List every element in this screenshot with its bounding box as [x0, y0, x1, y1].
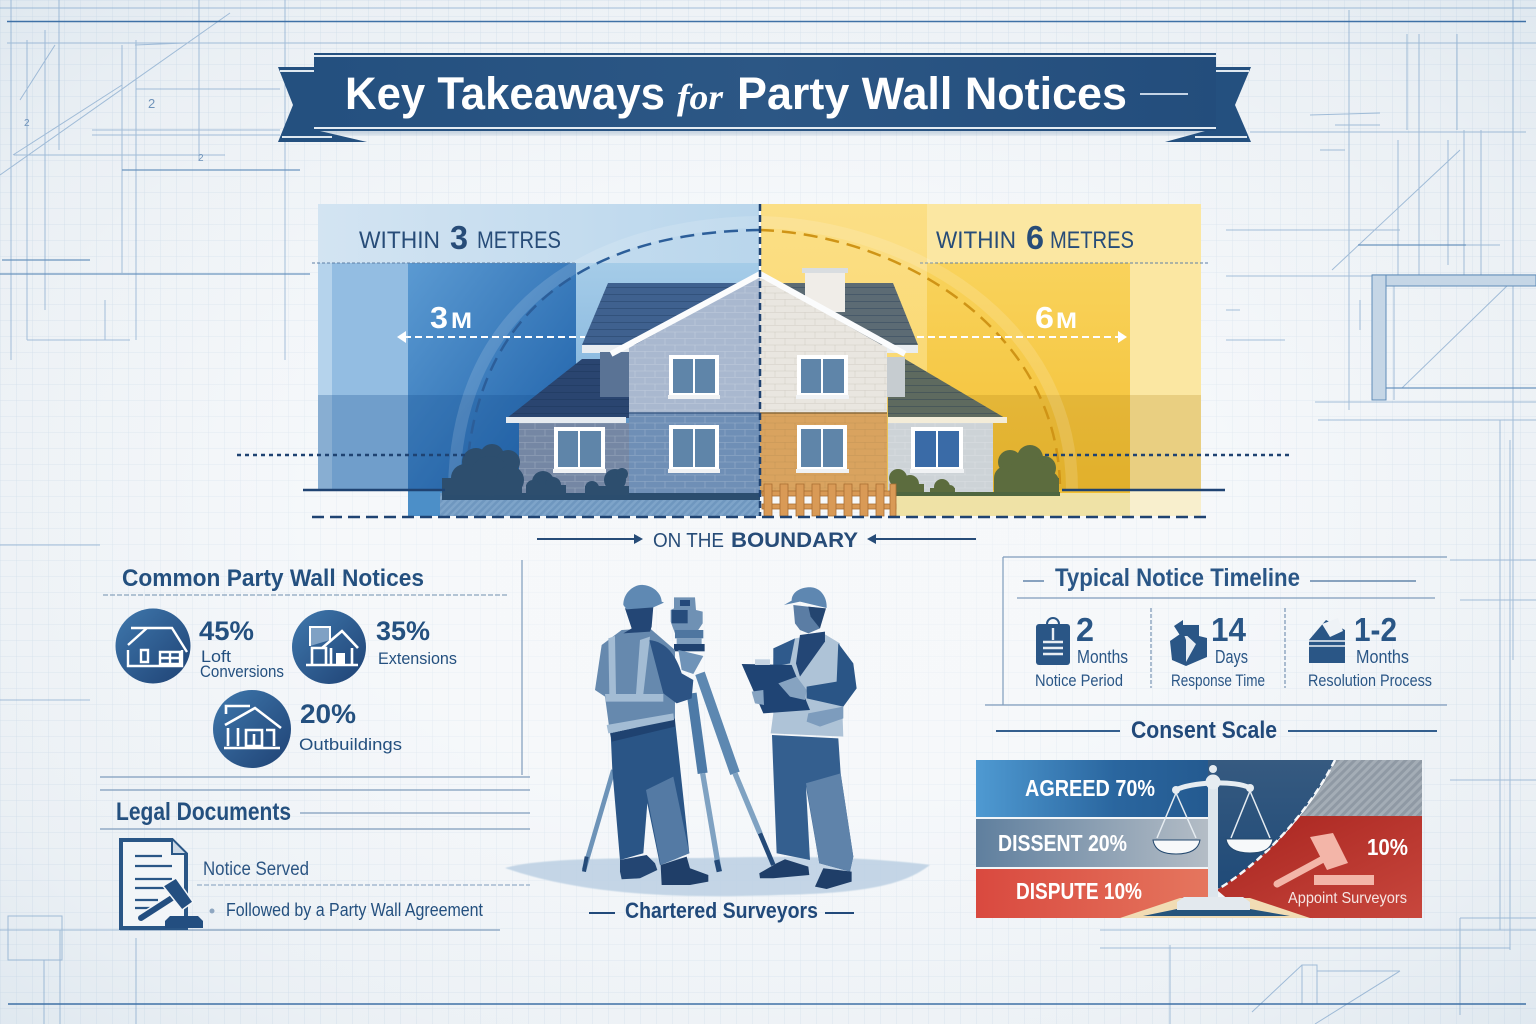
heading: Common Party Wall Notices: [122, 565, 424, 592]
panel: typical notice timeline: [985, 557, 1447, 705]
icon: balance scale: [1120, 765, 1310, 918]
chimney: [805, 270, 845, 312]
icon: loft conversions: [116, 608, 190, 684]
icon: document and gavel: [121, 840, 203, 928]
stat: 1-2 months resolution process: Resolution Process: [1308, 671, 1432, 690]
banner shadow: [316, 128, 1214, 134]
ground wash: [505, 857, 930, 896]
text: notice served: Notice Served: [203, 859, 309, 880]
title text: for: [677, 77, 724, 117]
panel: consent scale: [976, 717, 1437, 918]
measure: 3m arrow: [397, 300, 585, 343]
icon: extensions: [292, 610, 366, 684]
tripod: [584, 673, 773, 872]
stat: 45% loft conversions: Conversions: [200, 662, 284, 681]
label: within 6 metres: WITHIN: [936, 227, 1016, 254]
label: within 3 metres: WITHIN: [359, 227, 440, 254]
stat: 14 days response time: 14: [1211, 611, 1247, 648]
stat: 2 months notice period: Notice Period: [1035, 671, 1123, 690]
banner main band: [314, 53, 1216, 131]
icon: ballot box: [1309, 618, 1345, 663]
stat: 14 days response time: [1171, 611, 1265, 690]
stat: 2 months notice period: [1035, 611, 1128, 690]
boundary and ground lines: [237, 204, 1290, 517]
drafting lines, top left: [0, 0, 1536, 360]
stat: 20% outbuildings: Outbuildings: [299, 735, 402, 754]
house: [442, 268, 1007, 500]
surveyor right with clipboard: [742, 587, 857, 889]
hero diagram: boundary zones and house: [237, 204, 1290, 552]
panel: legal documents: [100, 798, 530, 930]
measure: 6m arrow: M: [1056, 308, 1077, 333]
icon: outbuildings: [213, 690, 291, 768]
text: appoint surveyors: Appoint Surveyors: [1288, 890, 1407, 907]
title banner: [278, 53, 1251, 142]
title text: Key Takeaways: [345, 68, 665, 119]
bar: agreed: AGREED 70%: [1025, 775, 1155, 801]
icon: clipboard: [1036, 618, 1070, 665]
stat: 45% loft conversions: 45%: [199, 616, 254, 646]
windows: [556, 357, 961, 469]
stat: 20% outbuildings: [299, 699, 402, 754]
label: within 3 metres: 3: [450, 219, 468, 256]
stat: 2 months notice period: 2: [1076, 611, 1094, 648]
zone: within 6 metres: [761, 204, 1201, 516]
bar: dissent: DISSENT 20%: [998, 830, 1127, 856]
label: within 3 metres: [359, 219, 561, 256]
gable trim: [611, 274, 905, 354]
panel: common party wall notices: [100, 560, 530, 790]
surveyor left: [595, 585, 708, 885]
right side: navy, hatch and red sectors: [1208, 760, 1422, 918]
background: blueprint paper: 2: [24, 118, 30, 129]
drafting lines, middle and bottom: [0, 420, 1536, 950]
bullet text: followed by a party wall agreement: Followed by a Party Wall Agreement: [226, 900, 483, 920]
background: blueprint paper: 2: [198, 153, 204, 164]
measure: 3m arrow: 3: [430, 300, 448, 335]
stat: 1-2 months resolution process: Months: [1356, 647, 1409, 667]
caption: chartered surveyors: Chartered Surveyors: [625, 898, 818, 923]
heading: Consent Scale: [1131, 717, 1277, 744]
back roof: [582, 283, 760, 345]
bar: dissent: [976, 819, 1208, 867]
stat: 14 days response time: Response Time: [1171, 671, 1265, 690]
stat: 1-2 months resolution process: [1308, 611, 1432, 690]
bar: dispute: DISPUTE 10%: [1016, 878, 1142, 904]
label: within 6 metres: [936, 219, 1134, 256]
stat: 2 months notice period: Months: [1077, 647, 1128, 667]
measure: 3m arrow: M: [451, 308, 472, 333]
title text: [345, 68, 1127, 119]
stat: 45% loft conversions: [199, 616, 284, 681]
label: on the boundary: BOUNDARY: [731, 529, 858, 552]
fence: [762, 484, 896, 516]
stat: 14 days response time: Days: [1215, 647, 1248, 667]
drafting lines, top right: [1226, 0, 1536, 660]
stat: 1-2 months resolution process: 1-2: [1354, 611, 1397, 648]
shrubs: [442, 444, 1060, 496]
walls: [629, 276, 760, 413]
stat: 35% extensions: [376, 616, 457, 668]
theodolite: [671, 597, 705, 651]
icon: response box: [1170, 620, 1207, 666]
bar: agreed: [976, 760, 1208, 817]
heading: Typical Notice Timeline: [1055, 564, 1300, 592]
illustration: chartered surveyors: [505, 585, 930, 923]
background: blueprint paper: 2: [148, 96, 155, 111]
stat: 35% extensions: 35%: [376, 616, 430, 646]
zone: within 3 metres: [318, 204, 760, 516]
label: within 6 metres: METRES: [1050, 227, 1134, 254]
side wings: [507, 359, 629, 418]
text: 10%: 10%: [1367, 834, 1408, 860]
stat: 45% loft conversions: Loft: [201, 647, 231, 666]
label: on the boundary: [537, 529, 976, 552]
label: within 6 metres: 6: [1026, 219, 1044, 256]
stat: 20% outbuildings: 20%: [300, 699, 356, 729]
stat: 35% extensions: Extensions: [378, 649, 457, 668]
measure: 6m arrow: [917, 300, 1127, 343]
measure: 6m arrow: 6: [1035, 300, 1054, 335]
title text: Party Wall Notices: [737, 68, 1127, 119]
dashed reach arcs: [454, 222, 1072, 490]
banner ribbon tails: [278, 67, 1251, 142]
heading: Legal Documents: [116, 798, 291, 826]
label: on the boundary: ON THE: [653, 530, 724, 552]
label: within 3 metres: METRES: [477, 227, 561, 254]
bar: dispute: [976, 869, 1208, 918]
icon: gavel: [1277, 833, 1374, 885]
